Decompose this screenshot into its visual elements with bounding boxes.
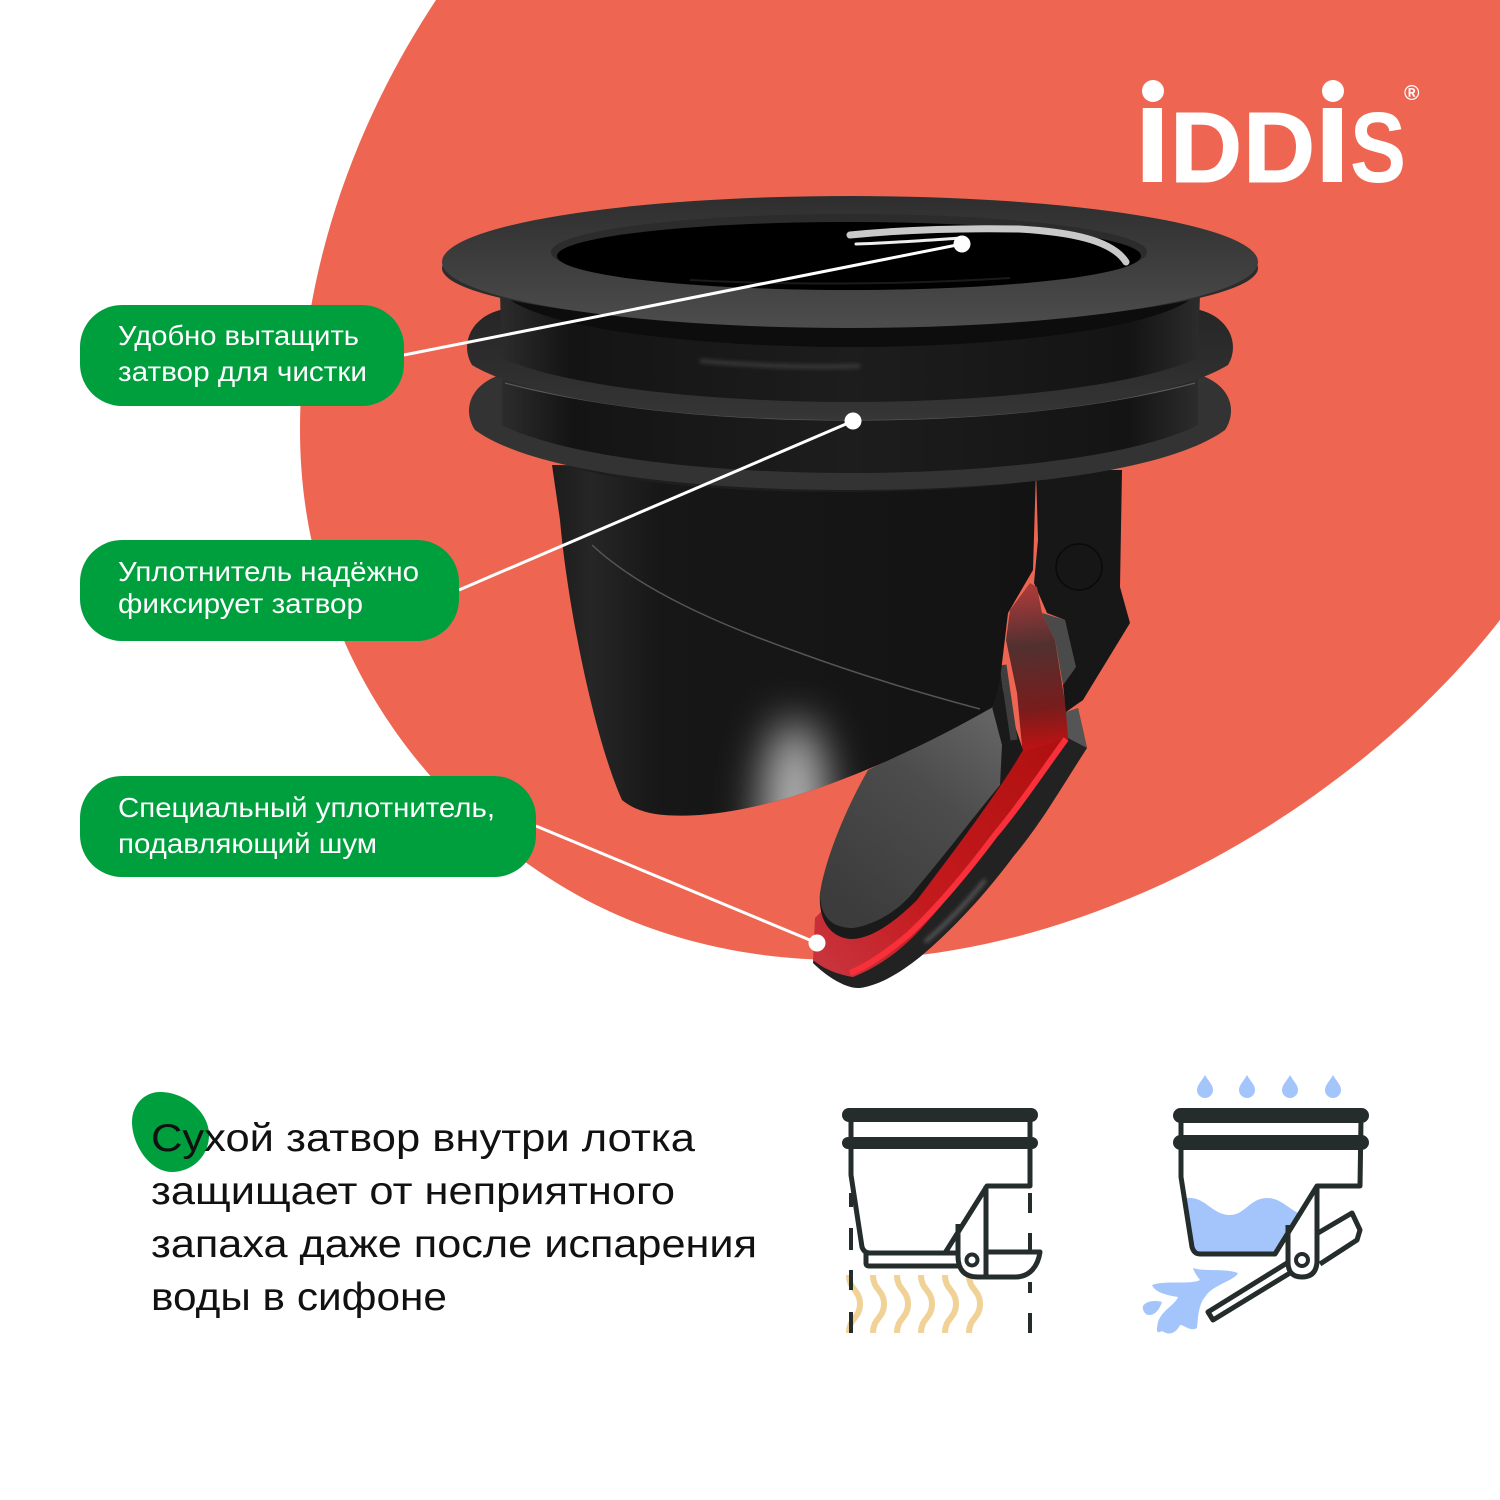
- flap side face: [1066, 708, 1087, 748]
- description text: запаха даже после испарения: [151, 1223, 757, 1266]
- water droplet: [1143, 1301, 1162, 1315]
- product: drain seal: [442, 196, 1258, 988]
- upper flap: [1318, 1213, 1360, 1264]
- flange groove shadow: [500, 223, 1200, 347]
- flap dark ridge: [820, 667, 1023, 939]
- logo: i: [1313, 55, 1352, 212]
- hinge pin: [1296, 1254, 1308, 1266]
- water in cup: [1187, 1198, 1298, 1253]
- hinge pin: [966, 1254, 978, 1266]
- cup outline: [1181, 1120, 1361, 1254]
- body highlight: [763, 720, 827, 900]
- flange top: [442, 196, 1258, 328]
- flap ridge highlight: [1003, 665, 1014, 740]
- cup outline: [851, 1120, 1030, 1253]
- callout 1: [80, 236, 970, 406]
- description text: воды в сифоне: [151, 1276, 447, 1319]
- hinge pin: [1056, 544, 1102, 590]
- logo: i: [1133, 55, 1172, 212]
- flap grey tab: [1042, 613, 1076, 685]
- leader line 3: [536, 826, 817, 943]
- leader dot 3: [808, 934, 826, 952]
- pill 2: [80, 540, 459, 641]
- top band: [1173, 1108, 1369, 1123]
- flap dark tab base: [1063, 667, 1083, 712]
- flap red gasket upper: [1006, 583, 1068, 757]
- pill 3: [80, 776, 536, 877]
- groove line: [505, 383, 1195, 420]
- background coral shape: [300, 0, 1500, 960]
- description text: Сухой затвор внутри лотка: [151, 1117, 695, 1160]
- logo: D: [1243, 92, 1315, 204]
- logo: ®: [1404, 82, 1420, 105]
- second band: [842, 1137, 1038, 1149]
- flange edge: [442, 210, 1258, 326]
- pill 3 text: подавляющий шум: [118, 828, 377, 859]
- hinge bracket: [1034, 470, 1130, 712]
- spring clip thin: [856, 238, 962, 244]
- closed flap: [866, 1253, 958, 1266]
- logo: S: [1350, 91, 1406, 204]
- upper ring highlight: [700, 361, 860, 367]
- inner rim: [690, 278, 1010, 284]
- upper ring lip: [467, 310, 1233, 420]
- callout 3: [80, 776, 826, 952]
- water splash: [1152, 1268, 1238, 1333]
- pill 1 text: Удобно вытащить: [118, 320, 359, 351]
- leader line 2: [459, 421, 853, 590]
- pill 1: [80, 305, 404, 406]
- callout 2: [80, 412, 862, 641]
- drain hole: [557, 222, 1141, 290]
- leader dot 1: [954, 236, 970, 252]
- logo: D: [1170, 92, 1242, 204]
- logo: [1133, 55, 1420, 212]
- upper ring band: [500, 295, 1200, 402]
- lower ring band: [502, 370, 1198, 473]
- collar: [552, 412, 1124, 492]
- hinge post: [1288, 1186, 1317, 1277]
- counter flap: [986, 1252, 1040, 1277]
- leader line 1: [404, 244, 962, 355]
- icon: open seal with water: [1143, 1075, 1369, 1333]
- pipe dashes: [851, 1193, 1030, 1333]
- green accent blob: [132, 1092, 209, 1172]
- flap disc: [820, 707, 1002, 928]
- pill 3 text: Специальный уплотнитель,: [118, 792, 495, 823]
- flap red plate: [813, 730, 1068, 977]
- icon: closed dry seal with odour: [842, 1108, 1040, 1333]
- water drops: [1197, 1075, 1341, 1098]
- flange inner bevel: [551, 214, 1147, 290]
- body: [552, 465, 1036, 816]
- hinge post: [958, 1186, 986, 1277]
- top band: [842, 1108, 1038, 1122]
- rubber edge highlight: [925, 880, 985, 942]
- lower flap: [1208, 1263, 1290, 1320]
- leader dot 2: [844, 412, 862, 430]
- spring clip: [850, 229, 1126, 262]
- pill 2 text: Уплотнитель надёжно: [118, 556, 419, 587]
- description text: защищает от неприятного: [151, 1170, 675, 1213]
- lower ring lip: [469, 375, 1231, 490]
- pill 2 text: фиксирует затвор: [118, 588, 363, 619]
- bright red stripe: [850, 739, 1066, 973]
- body seam: [592, 545, 980, 709]
- odour waves: [849, 1275, 980, 1333]
- second band: [1173, 1135, 1369, 1150]
- flap outer rubber edge: [813, 708, 1087, 988]
- pill 1 text: затвор для чистки: [118, 356, 367, 387]
